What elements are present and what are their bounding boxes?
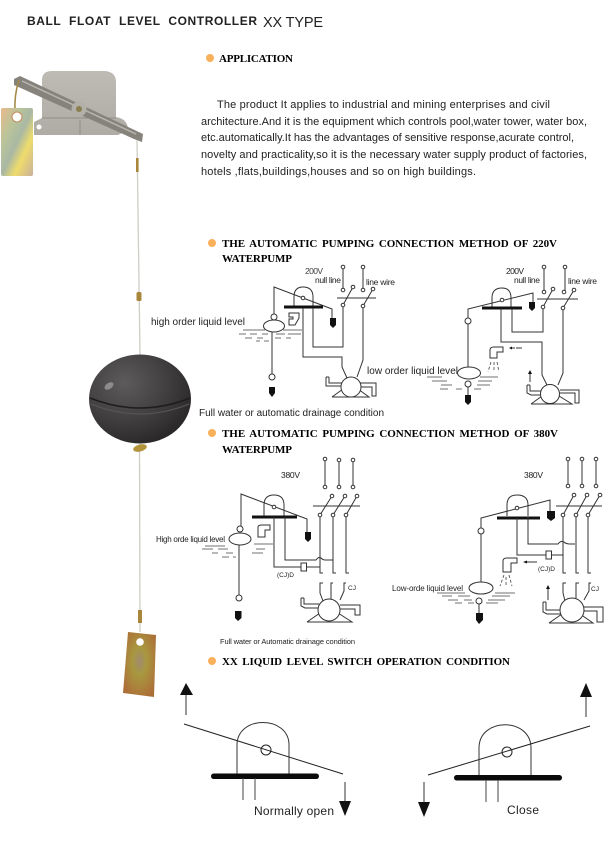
labels: null line [315, 275, 341, 285]
relay [546, 551, 552, 559]
water lines [427, 377, 498, 389]
relay [301, 563, 306, 571]
heading text: XX LIQUID LEVEL SWITCH OPERATION CONDITION [222, 656, 510, 668]
labels: (CJ)D [277, 572, 294, 579]
diagram: 220V low level [367, 265, 597, 405]
heading text: WATERPUMP [222, 444, 292, 456]
pivot [502, 747, 512, 757]
section heading: 220V connection [208, 238, 557, 265]
application paragraph: hotels ,flats,buildings,houses and so on high buildings. [201, 166, 476, 178]
section heading: switch operation condition [208, 656, 510, 668]
switch body [284, 287, 323, 325]
wiring [517, 459, 602, 573]
labels [156, 470, 356, 646]
nozzle and spray [488, 347, 503, 372]
switch housing [34, 71, 128, 135]
diagram: 380V low level [392, 457, 603, 624]
arrows: flow direction [523, 560, 550, 600]
label: Normally open [254, 804, 334, 818]
application paragraph: etc.automatically.It has the advantages of sensitive response,acurate control, [201, 132, 574, 144]
pump [301, 583, 360, 622]
section: application [206, 53, 293, 65]
pump [543, 583, 603, 623]
diagram: 220V high level [151, 265, 395, 419]
bullet [208, 239, 216, 247]
lever and float [469, 500, 555, 624]
section heading: 380V connection [208, 428, 558, 456]
arrow: up flow [529, 373, 531, 382]
counterweight tag [1, 80, 33, 176]
terminals [318, 457, 359, 517]
labels: null line [514, 275, 540, 285]
labels: 200V [305, 266, 323, 276]
heading text: THE AUTOMATIC PUMPING CONNECTION METHOD OF 220V [222, 238, 557, 250]
switch body [482, 288, 522, 310]
wiring [501, 267, 578, 385]
labels: CJ [348, 585, 356, 592]
lever and float [264, 287, 336, 397]
arrow: down [418, 782, 430, 817]
labels: line wire [366, 277, 395, 287]
lever [428, 726, 590, 775]
contact legs [243, 778, 255, 800]
application paragraph: The product It applies to industrial and mining enterprises and civil [217, 99, 550, 111]
dome body [237, 722, 289, 775]
labels: (CJ)D [538, 566, 555, 573]
labels: low order liquid level [367, 366, 458, 377]
labels [367, 266, 597, 377]
labels: 200V [506, 266, 524, 276]
switch body [497, 495, 540, 520]
bullet [208, 429, 216, 437]
heading text: THE AUTOMATIC PUMPING CONNECTION METHOD OF 380V [222, 428, 558, 440]
diagram: closed switch [418, 683, 592, 817]
labels: 380V [524, 470, 543, 480]
water lines [437, 593, 515, 603]
contact legs [486, 780, 498, 802]
terminals [341, 265, 375, 308]
wiring [303, 267, 376, 378]
black float ball [89, 354, 191, 444]
labels [392, 470, 599, 593]
pump [326, 377, 376, 397]
terminals [561, 457, 602, 517]
lever arm [14, 76, 143, 142]
title [27, 14, 323, 31]
arrow: flow to nozzle [512, 347, 522, 349]
base bar [211, 774, 319, 779]
title: XX TYPE [263, 15, 323, 31]
lower wire [132, 443, 148, 632]
lever and float [229, 494, 311, 621]
labels [151, 266, 395, 419]
wiring [274, 459, 360, 573]
arrow: down [339, 782, 351, 816]
bullet [206, 54, 214, 62]
labels: 380V [281, 470, 300, 480]
suspension wire [136, 140, 142, 355]
bullet [208, 657, 216, 665]
heading: application: APPLICATION [219, 53, 293, 65]
diagram: 380V high level [156, 457, 360, 646]
lever and float [458, 293, 535, 405]
labels: line wire [568, 276, 597, 286]
labels: Low-orde liquid level [392, 584, 463, 593]
photo: ball float level controller [1, 71, 191, 697]
nozzle and spray [500, 558, 517, 587]
diagram: normally open switch [180, 683, 351, 818]
heading text: WATERPUMP [222, 253, 292, 265]
application paragraph [201, 99, 587, 178]
application paragraph: architecture.And it is the equipment which controls pool,water tower, water box, [201, 116, 587, 128]
labels: Full water or Automatic drainage condition [220, 637, 355, 646]
application paragraph: novelty and practicality,so it is the necessary water supply product of factories, [201, 149, 587, 161]
arrow: up [580, 683, 592, 717]
labels: High orde liquid level [156, 535, 225, 544]
pump [509, 346, 579, 404]
lower weight tag [123, 632, 156, 697]
labels: Full water or automatic drainage condition [199, 408, 384, 419]
terminals [541, 265, 576, 310]
switch body [252, 495, 297, 537]
title: BALL FLOAT LEVEL CONTROLLER [27, 14, 257, 28]
lever [184, 724, 343, 774]
label: Close [507, 803, 539, 817]
water lines [239, 330, 302, 341]
base bar [454, 775, 562, 780]
arrow: up [180, 683, 193, 715]
labels: CJ [591, 586, 599, 593]
labels: high order liquid level [151, 317, 245, 328]
water lines [202, 544, 273, 557]
dome body [479, 725, 531, 775]
pivot [261, 745, 271, 755]
